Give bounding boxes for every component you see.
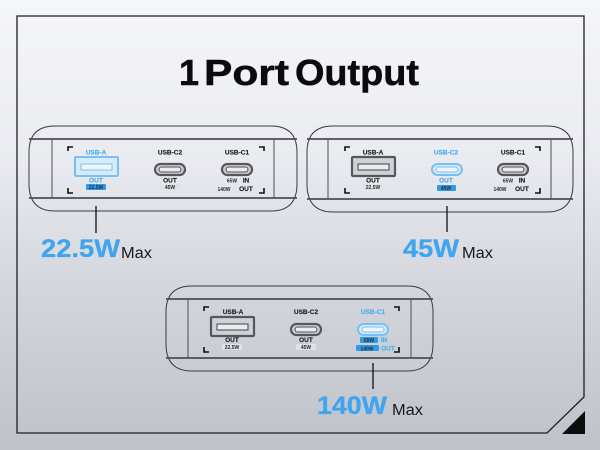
value: 140W Max bbox=[317, 392, 423, 420]
corner triangle bbox=[562, 411, 585, 434]
port: USB-C1 highlighted: IN bbox=[381, 337, 388, 344]
port: USB-C2 highlighted bbox=[432, 150, 462, 192]
value: 22.5W Max: Max bbox=[121, 245, 152, 262]
port: USB-C1: IN bbox=[519, 178, 526, 184]
port: USB-C1 highlighted: OUT bbox=[381, 346, 395, 352]
leader line 1 bbox=[95, 206, 97, 233]
port: USB-C2: 45W bbox=[165, 185, 175, 191]
value: 140W Max: 140W bbox=[317, 392, 387, 420]
port: USB-C2 highlighted: 45W bbox=[441, 186, 451, 192]
port: USB-C2 bbox=[155, 150, 185, 191]
value: 22.5W Max bbox=[41, 235, 152, 263]
panel: USB-C1 device bbox=[166, 286, 433, 371]
port: USB-A highlighted: OUT bbox=[89, 178, 103, 184]
port: USB-C2: USB-C2 bbox=[294, 309, 318, 316]
leader line 2 bbox=[446, 206, 448, 232]
port: USB-C1 highlighted: 140W bbox=[360, 346, 374, 352]
port: USB-C1 bbox=[493, 150, 529, 193]
device body bbox=[29, 126, 297, 211]
title: 1 bbox=[179, 52, 199, 93]
port: USB-A: USB-A bbox=[223, 309, 244, 316]
value: 22.5W Max: 22.5W bbox=[41, 235, 120, 263]
port: USB-C1: OUT bbox=[239, 186, 253, 193]
leader line 3 bbox=[372, 363, 374, 389]
port: USB-C2 highlighted: OUT bbox=[439, 178, 453, 184]
port: USB-A highlighted bbox=[75, 150, 118, 191]
port: USB-A: OUT bbox=[366, 178, 380, 184]
port: USB-C2: OUT bbox=[299, 337, 313, 344]
value: 45W Max: 45W bbox=[403, 235, 459, 263]
port: USB-A bbox=[211, 309, 254, 351]
port: USB-A: 22.5W bbox=[366, 185, 381, 191]
port: USB-C1 bbox=[217, 150, 253, 193]
port: USB-C1: OUT bbox=[515, 186, 529, 193]
panel: USB-A device bbox=[29, 126, 297, 211]
port: USB-C1 highlighted: USB-C1 bbox=[361, 309, 385, 316]
device body bbox=[307, 126, 573, 212]
value: 45W Max bbox=[403, 235, 493, 263]
device body bbox=[166, 286, 433, 371]
port: USB-C2 bbox=[291, 309, 321, 351]
port: USB-C2: OUT bbox=[163, 178, 177, 184]
port: USB-C1: 140W bbox=[217, 187, 231, 193]
panel: USB-C2 device bbox=[307, 126, 573, 212]
port: USB-A highlighted: 22.5W bbox=[89, 185, 104, 191]
port: USB-C1 highlighted bbox=[356, 309, 395, 352]
port: USB-A bbox=[352, 150, 395, 191]
port: USB-A: USB-A bbox=[363, 150, 384, 156]
port: USB-A: OUT bbox=[225, 337, 239, 344]
port: USB-C2 highlighted: USB-C2 bbox=[434, 150, 458, 156]
title: Port bbox=[204, 52, 289, 93]
port: USB-C1: 65W bbox=[227, 178, 237, 184]
port: USB-C1: 140W bbox=[493, 187, 507, 193]
port: USB-C1: USB-C1 bbox=[225, 150, 249, 156]
port: USB-C1: USB-C1 bbox=[501, 150, 525, 156]
port: USB-A: 22.5W bbox=[225, 345, 240, 351]
value: 45W Max: Max bbox=[462, 245, 493, 262]
port: USB-C1: 65W bbox=[503, 178, 513, 184]
value: 140W Max: Max bbox=[392, 402, 423, 419]
port: USB-C1 highlighted: 65W bbox=[364, 338, 374, 344]
port: USB-C2: USB-C2 bbox=[158, 150, 182, 156]
title: Output bbox=[295, 52, 419, 93]
port: USB-A highlighted: USB-A bbox=[86, 150, 107, 156]
port: USB-C1: IN bbox=[243, 178, 250, 184]
port: USB-C2: 45W bbox=[301, 345, 311, 351]
